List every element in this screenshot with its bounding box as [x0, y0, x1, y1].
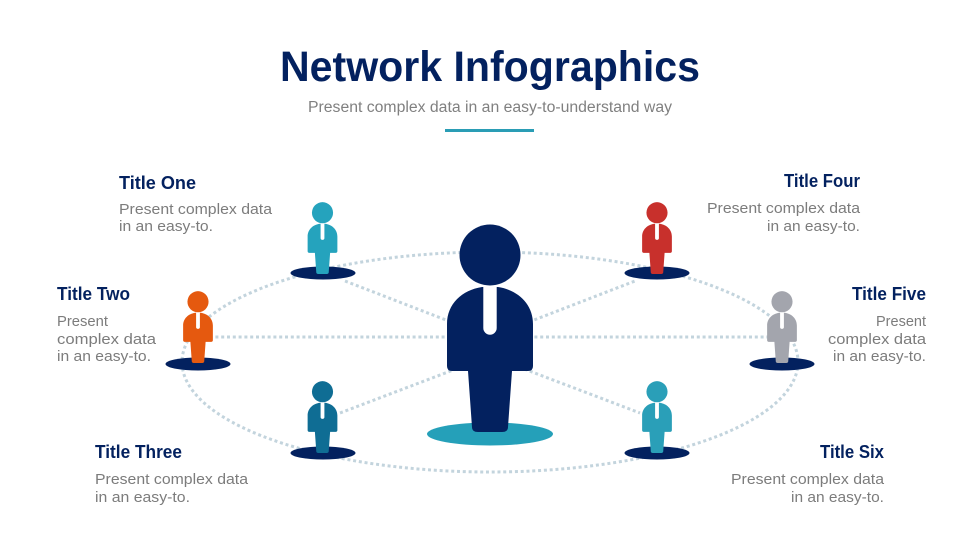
- person: title one: [290, 202, 356, 280]
- text block: title five: complex data: [828, 331, 927, 348]
- text block: title four: in an easy-to.: [767, 218, 860, 235]
- text block: title six: [731, 442, 885, 506]
- text block: title six: Title Six: [820, 442, 884, 462]
- subtitle: Present complex data in an easy-to-understand way: [308, 99, 672, 116]
- text block: title one: Present complex data: [119, 201, 273, 218]
- text block: title five: Present: [876, 313, 927, 330]
- text block: title two: complex data: [57, 331, 157, 348]
- text block: title four: [707, 171, 861, 235]
- text block: title three: Present complex data: [95, 471, 249, 488]
- text block: title three: [95, 442, 249, 506]
- title: Network Infographics: [280, 43, 700, 91]
- person: title two: [166, 291, 230, 370]
- person: title five: [750, 291, 814, 370]
- text block: title one: Title One: [119, 173, 196, 193]
- text block: title one: [119, 173, 273, 235]
- text block: title four: Title Four: [784, 171, 860, 191]
- title underline: [445, 129, 534, 132]
- text block: title three: Title Three: [95, 442, 182, 462]
- text block: title four: Present complex data: [707, 200, 861, 217]
- text block: title six: in an easy-to.: [791, 489, 884, 506]
- text block: title two: Title Two: [57, 284, 130, 304]
- text block: title five: Title Five: [852, 284, 926, 304]
- text block: title three: in an easy-to.: [95, 489, 190, 506]
- text block: title two: Present: [57, 313, 109, 330]
- text block: title two: in an easy-to.: [57, 348, 151, 365]
- text block: title five: [828, 284, 927, 365]
- text block: title five: in an easy-to.: [833, 348, 926, 365]
- central person: [427, 224, 553, 446]
- network connection lines: [182, 252, 798, 472]
- text block: title six: Present complex data: [731, 471, 885, 488]
- person: title four: [624, 202, 690, 280]
- person: title six: [624, 381, 690, 460]
- text block: title two: [57, 284, 157, 365]
- text block: title one: in an easy-to.: [119, 218, 213, 235]
- person: title three: [290, 381, 356, 460]
